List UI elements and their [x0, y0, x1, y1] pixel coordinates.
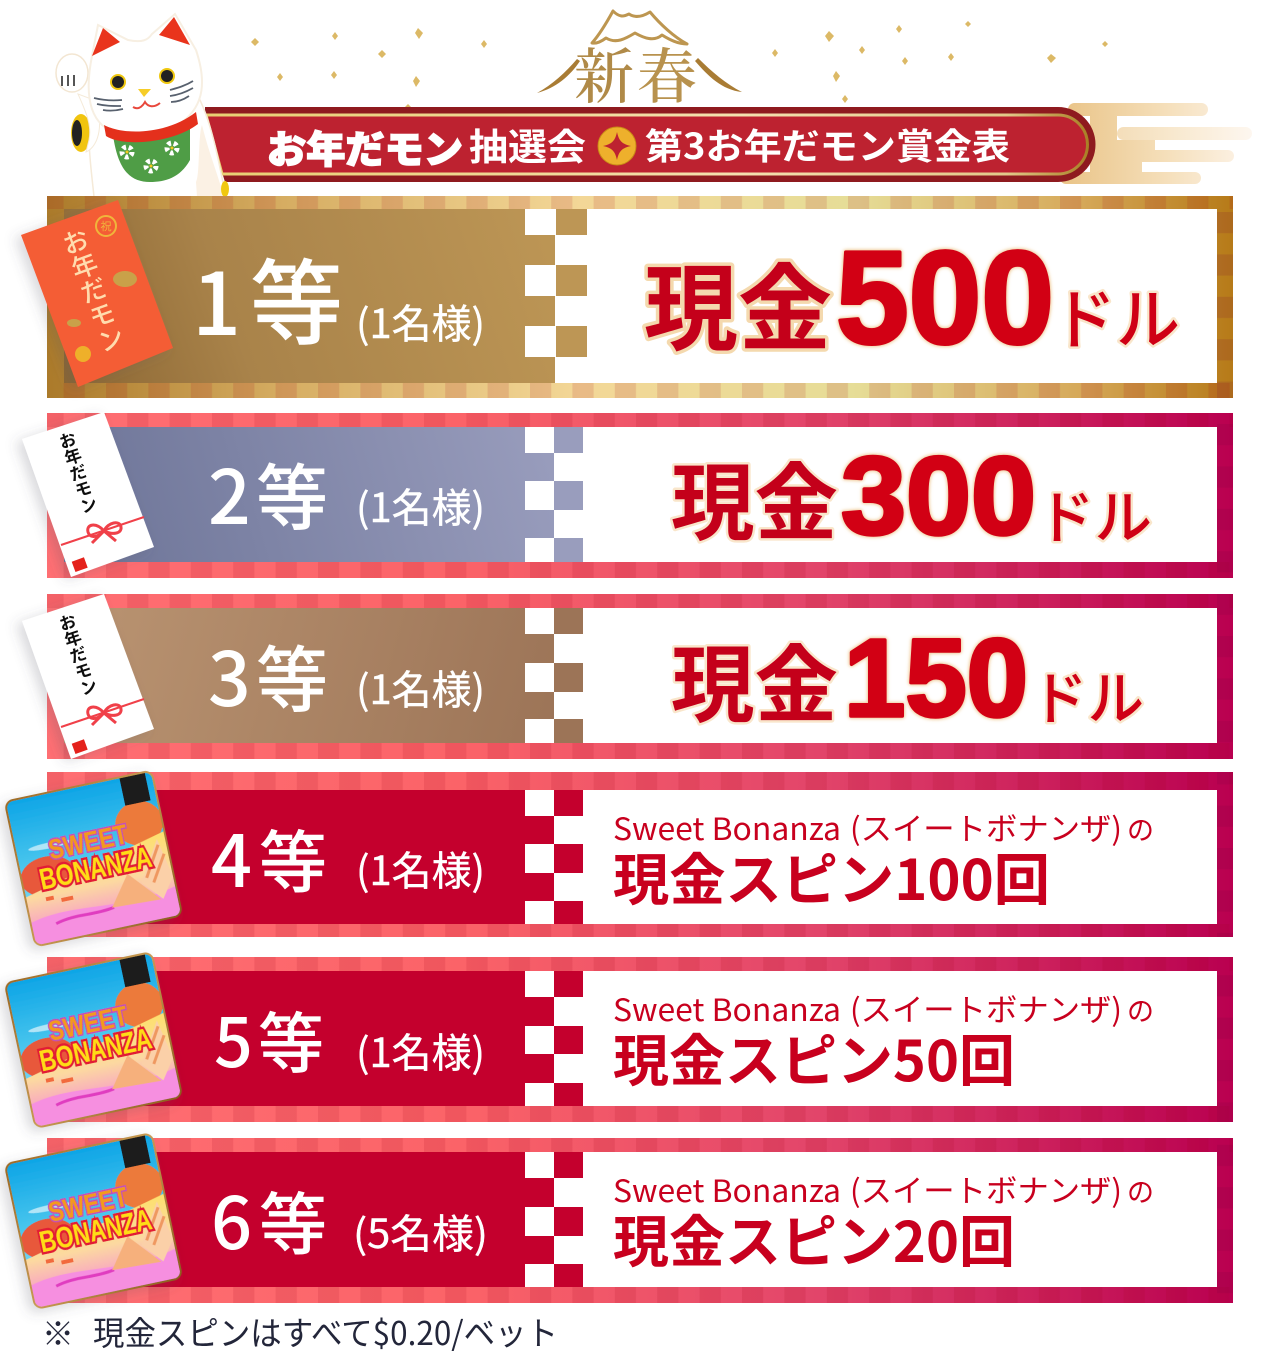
icon: game thumbnail: BONANZA: [36, 1203, 155, 1259]
rank label: [208, 619, 328, 728]
icon: game thumbnail: SWEET: [46, 1000, 130, 1047]
rank label: 4: [211, 803, 252, 908]
icon: game thumbnail: BONANZA: [36, 1022, 155, 1078]
prize: 現金スピン50回: [613, 1017, 1015, 1098]
prize: ドル: [1052, 267, 1180, 363]
emblem: Mt. Fuji and 新春: 春: [637, 30, 697, 116]
title banner: [205, 107, 1096, 182]
icon: red envelope: お年だモン: [54, 223, 133, 357]
rank label: 6: [211, 1165, 252, 1270]
icon: game thumbnail: [4, 769, 183, 948]
icon: game thumbnail: BONANZA: [36, 841, 155, 897]
rank label: 等: [259, 808, 327, 907]
game name: [613, 985, 1154, 1030]
winners: (1名様): [356, 839, 485, 897]
game name: Sweet Bonanza: [613, 985, 841, 1030]
border: red checker: [47, 1138, 1233, 1303]
emblem: Mt. Fuji and 新春: 新: [574, 30, 634, 116]
prize: 現金スピン100回: [613, 836, 1050, 917]
title text: prize table: 第3お年だモン賞金表: [645, 118, 1010, 170]
icon: game thumbnail: [4, 1132, 183, 1310]
game name: [613, 1166, 1154, 1211]
winners: (1名様): [356, 292, 485, 350]
border: gold checker: [47, 196, 1233, 398]
game name: の: [1127, 990, 1154, 1029]
icon: gold coin: [598, 127, 636, 165]
prize: 現金: [671, 619, 838, 740]
icon: noshi envelope: [22, 594, 154, 759]
checker divider: [525, 790, 583, 924]
rank label: 1: [192, 235, 241, 360]
icon: game thumbnail: [4, 951, 183, 1129]
game name: (スイートボナンザ): [850, 1166, 1122, 1211]
prize: [671, 435, 1152, 558]
border: red checker: [47, 772, 1233, 937]
rank label: [211, 1165, 327, 1270]
title text: lottery name: お年だモン: [267, 119, 463, 174]
prize: [671, 617, 1144, 740]
row: 6th prize: [4, 1132, 1233, 1310]
winners: (1名様): [356, 476, 485, 534]
game name: [613, 804, 1154, 849]
winners: (1名様): [356, 658, 485, 716]
gold clouds: [1060, 103, 1252, 184]
checker divider: [525, 608, 583, 743]
prize: ドル: [1037, 471, 1152, 555]
rank label: 等: [258, 991, 324, 1087]
icon: game thumbnail: SWEET: [46, 1181, 130, 1228]
row: 2nd prize: [22, 412, 1233, 578]
rank label: 等: [250, 229, 343, 364]
game name: の: [1127, 809, 1154, 848]
row: 3rd prize: [22, 594, 1233, 759]
footnote: 現金スピンはすべて$0.20/ベット: [93, 1307, 558, 1355]
game name: (スイートボナンザ): [850, 985, 1122, 1030]
prize: 300: [841, 435, 1036, 558]
border: red checker: [47, 594, 1233, 759]
winners: (1名様): [356, 1021, 485, 1079]
game name: Sweet Bonanza: [613, 1166, 841, 1211]
gold confetti: [251, 21, 1108, 110]
prize: [613, 804, 1154, 917]
prize: 現金: [644, 234, 832, 370]
border: red checker: [47, 957, 1233, 1122]
rank label: [208, 437, 328, 546]
prize: 現金スピン20回: [613, 1198, 1015, 1279]
emblem: Mt. Fuji and 新春: [537, 11, 742, 116]
checker divider: [525, 209, 587, 357]
icon: game thumbnail: SWEET: [46, 818, 130, 865]
prize: 500: [836, 224, 1054, 371]
rank label: 2: [208, 437, 251, 546]
icon: noshi envelope: お年だモン: [53, 610, 103, 699]
row: 5th prize: [4, 951, 1233, 1129]
checker divider: [525, 427, 583, 562]
footnote: ※: [42, 1309, 74, 1355]
title text: lottery: 抽選会: [469, 117, 586, 171]
prize: ドル: [1031, 652, 1144, 736]
rank label: 5: [214, 988, 253, 1087]
rank label: 等: [256, 622, 328, 727]
prize: [644, 224, 1180, 371]
rank label: [192, 229, 343, 364]
checker divider: [525, 971, 583, 1106]
rank label: [214, 988, 324, 1087]
rank label: 等: [259, 1170, 327, 1269]
prize: [613, 985, 1154, 1098]
icon: red envelope: [21, 200, 173, 387]
border: red checker: [47, 413, 1233, 578]
checker divider: [525, 1152, 583, 1287]
icon: red envelope: 祝: [100, 218, 112, 234]
winners: (5名様): [353, 1202, 488, 1260]
row: 1st prize: [21, 196, 1233, 398]
rank label: 3: [208, 619, 251, 728]
rank label: [211, 803, 327, 908]
icon: lucky cat: [56, 14, 229, 197]
game name: Sweet Bonanza: [613, 804, 841, 849]
row: 4th prize: [4, 769, 1233, 948]
rank label: 等: [256, 440, 328, 545]
prize: 現金: [671, 437, 838, 558]
icon: noshi envelope: [22, 412, 154, 577]
icon: noshi envelope: お年だモン: [53, 428, 103, 517]
game name: (スイートボナンザ): [850, 804, 1122, 849]
prize: [613, 1166, 1154, 1279]
game name: の: [1127, 1171, 1154, 1210]
prize: 150: [844, 617, 1028, 740]
